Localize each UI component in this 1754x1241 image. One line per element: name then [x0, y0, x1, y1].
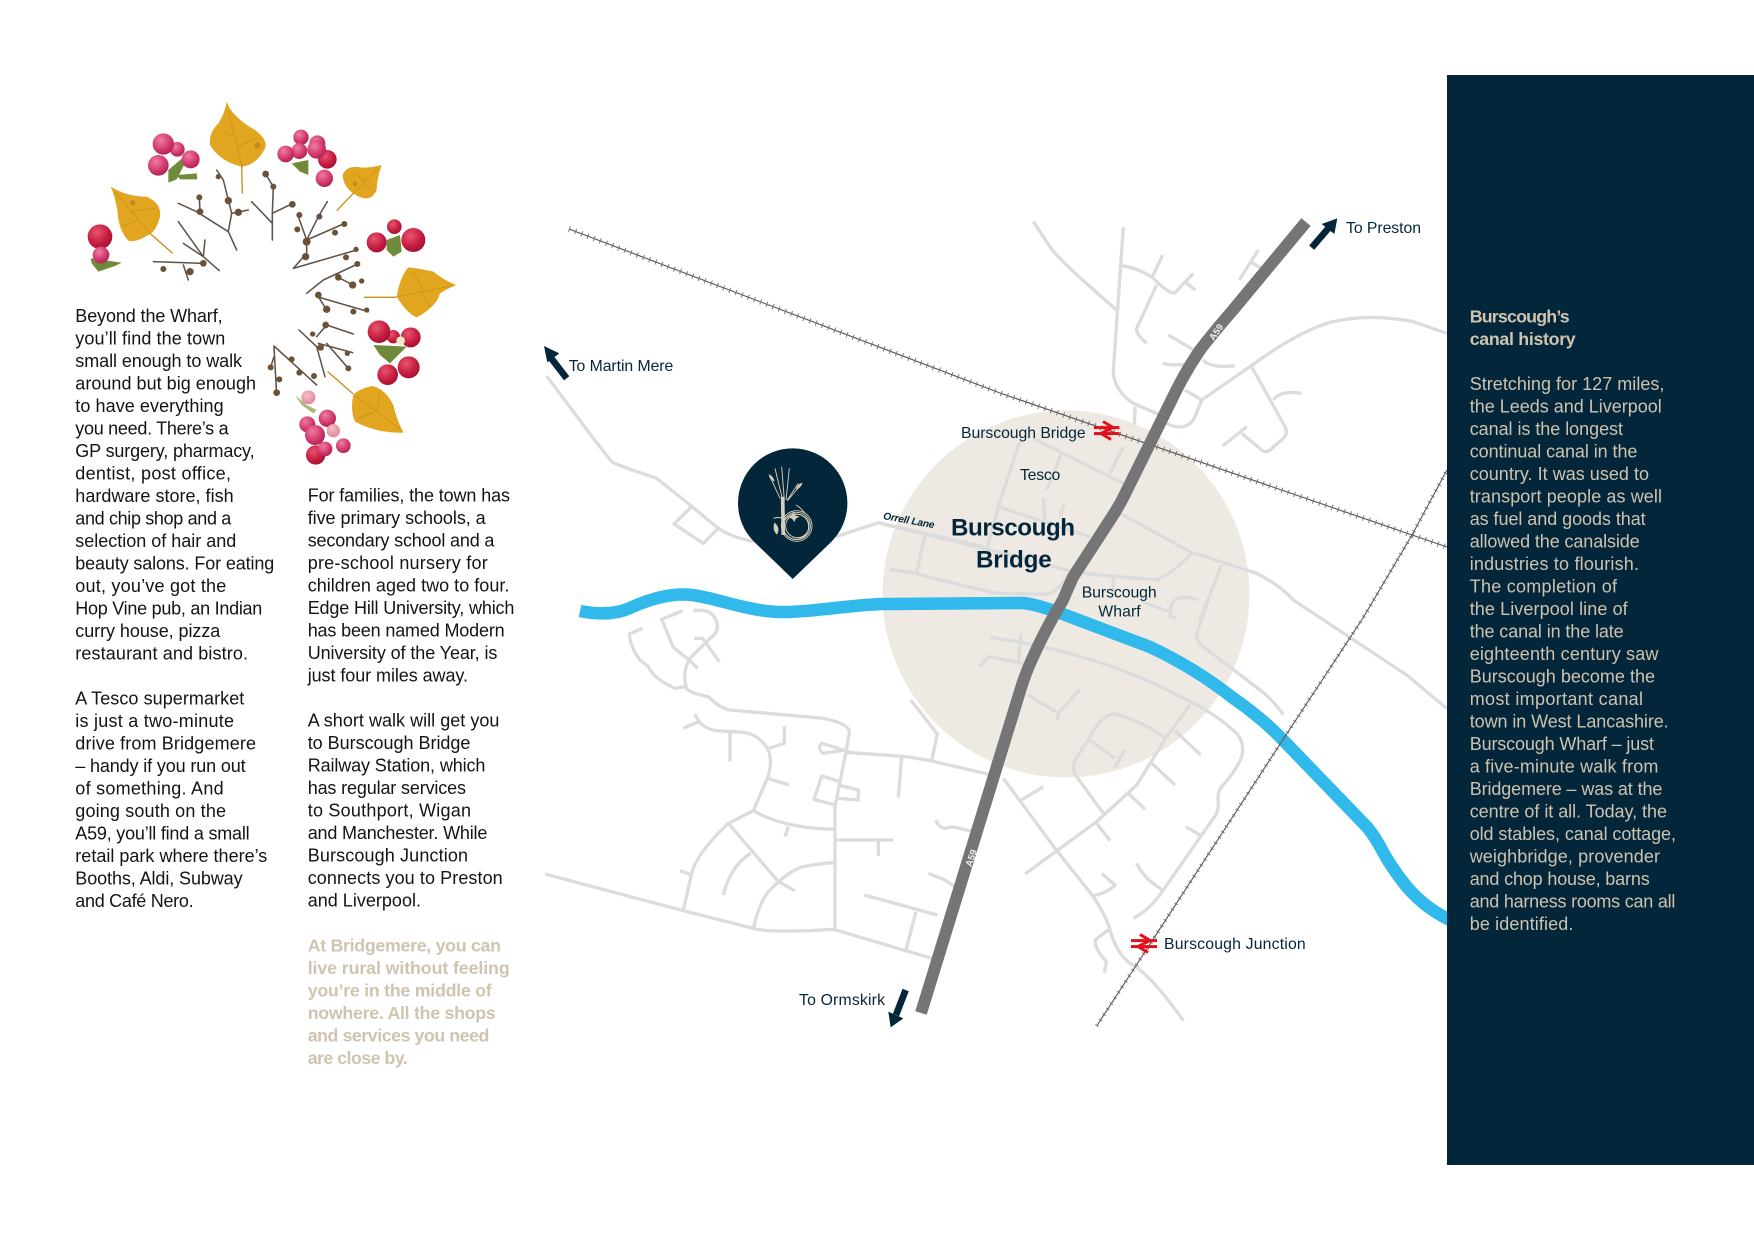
text column 2 [307, 486, 514, 911]
text column 2: pre-school nursery for [308, 553, 488, 573]
text column 1: beauty salons. For eating [75, 554, 274, 574]
text column 2: five primary schools, a [308, 508, 487, 528]
panel body text: centre of it all. Today, the [1470, 801, 1667, 821]
yellow leaves [111, 102, 456, 433]
text column 2: secondary school and a [308, 531, 495, 551]
direction arrow: To Preston [1312, 218, 1337, 248]
panel body text: canal is the longest [1470, 419, 1623, 439]
text column 1: of something. And [75, 779, 224, 799]
map labels: To Martin Mere [569, 358, 674, 375]
text column 2: to Burscough Bridge [308, 733, 470, 753]
panel body text: most important canal [1470, 689, 1643, 709]
text column 2: has been named Modern [308, 621, 505, 641]
text column 1: retail park where there’s [75, 846, 267, 866]
text column 1: around but big enough [75, 374, 256, 394]
map labels: Burscough [951, 514, 1075, 542]
text column 2: A short walk will get you [308, 711, 499, 731]
panel body text: Burscough Wharf – just [1470, 734, 1654, 754]
panel body text: as fuel and goods that [1470, 509, 1646, 529]
panel body text: country. It was used to [1470, 464, 1649, 484]
map labels: Burscough Bridge [961, 425, 1086, 442]
text column 1: you need. There’s a [75, 419, 230, 439]
direction arrow: To Ormskirk [888, 990, 906, 1027]
text column 2: connects you to Preston [308, 868, 503, 888]
map labels: Tesco [1020, 467, 1061, 484]
railway lines [569, 229, 1447, 1026]
panel body text: eighteenth century saw [1470, 644, 1659, 664]
panel heading: Burscough’s [1470, 306, 1570, 326]
map labels: Orrell Lane [882, 511, 936, 531]
text column 1: curry house, pizza [75, 621, 221, 641]
text column 1: Booths, Aldi, Subway [75, 869, 243, 889]
panel heading: canal history [1470, 329, 1576, 349]
panel body text: the Leeds and Liverpool [1470, 396, 1662, 416]
text column 1: dentist, post office, [75, 464, 231, 484]
panel body text: Burscough become the [1470, 666, 1655, 686]
text column 2: For families, the town has [308, 486, 510, 506]
text column 1: going south on the [75, 801, 226, 821]
text column 1: A Tesco supermarket [75, 689, 244, 709]
station icon: Burscough Bridge [1094, 422, 1120, 440]
A59 road labels: A59 [964, 848, 980, 868]
panel body text: allowed the canalside [1470, 531, 1640, 551]
panel body text: weighbridge, provender [1469, 846, 1660, 866]
map labels: Burscough [1082, 584, 1157, 602]
highlighted closing statement: and services you need [308, 1026, 489, 1046]
text column 2: and Manchester. While [308, 823, 487, 843]
text column 1 [75, 306, 274, 911]
panel body text: Stretching for 127 miles, [1470, 374, 1664, 394]
highlighted closing statement: nowhere. All the shops [308, 1003, 496, 1023]
map labels: Wharf [1098, 604, 1141, 620]
panel body text: industries to flourish. [1470, 554, 1639, 574]
highlighted closing statement: you’re in the middle of [308, 981, 492, 1001]
text column 1: GP surgery, pharmacy, [75, 441, 255, 461]
text column 1: A59, you’ll find a small [75, 824, 250, 844]
highlighted closing statement: are close by. [308, 1048, 408, 1068]
text column 1: selection of hair and [75, 531, 236, 551]
text column 1: Beyond the Wharf, [75, 306, 223, 326]
map [544, 218, 1450, 1027]
direction arrow: To Martin Mere [544, 346, 567, 378]
panel body text [1469, 374, 1676, 934]
panel body text: town in West Lancashire. [1470, 711, 1669, 731]
Burscough Bridge area circle [882, 410, 1250, 778]
twigs [153, 170, 369, 396]
map labels: Bridge [976, 546, 1052, 574]
text column 2: and Liverpool. [308, 891, 421, 911]
text column 1: is just a two-minute [75, 711, 234, 731]
text column 2: University of the Year, is [308, 643, 497, 663]
text column 2: to Southport, Wigan [308, 801, 471, 821]
emblem: reeds and coil [769, 467, 812, 541]
station icon: Burscough Junction [1131, 934, 1157, 952]
text column 1: Hop Vine pub, an Indian [75, 599, 262, 619]
text column 2: children aged two to four. [308, 576, 509, 596]
text column 1: out, you’ve got the [75, 576, 226, 596]
panel body text: the canal in the late [1470, 621, 1624, 641]
text column 1: and chip shop and a [75, 509, 232, 529]
highlighted closing statement: live rural without feeling [308, 958, 510, 978]
panel body text: old stables, canal cottage, [1470, 824, 1676, 844]
text column 2: has regular services [308, 778, 466, 798]
panel body text: be identified. [1470, 914, 1573, 934]
text column 1: to have everything [75, 396, 224, 416]
panel body text: continual canal in the [1470, 441, 1637, 461]
minor roads [545, 222, 1447, 1021]
panel body text: and harness rooms can all [1470, 891, 1675, 911]
text column 1: drive from Bridgemere [75, 734, 256, 754]
panel body text: The completion of [1470, 576, 1618, 596]
text column 2: Edge Hill University, which [308, 598, 514, 618]
map labels: Burscough Junction [1164, 936, 1306, 953]
panel body text: Bridgemere – was at the [1470, 779, 1662, 799]
panel heading [1470, 306, 1576, 349]
location pin with emblem [738, 448, 847, 579]
map labels: To Ormskirk [799, 992, 885, 1009]
panel body text: the Liverpool line of [1470, 599, 1629, 619]
map labels [569, 220, 1421, 1009]
panel body text: transport people as well [1470, 486, 1662, 506]
text column 2: Burscough Junction [308, 846, 468, 866]
map labels: To Preston [1346, 220, 1421, 237]
text column 1: small enough to walk [75, 351, 243, 371]
text column 1: you’ll find the town [75, 329, 225, 349]
text column 1: restaurant and bistro. [75, 644, 248, 664]
wreath of autumn leaves, berries and twigs [88, 102, 456, 465]
A59 road labels: A59 [1207, 322, 1226, 343]
A59 main road [921, 222, 1306, 1013]
panel body text: and chop house, barns [1470, 869, 1650, 889]
highlighted closing statement [308, 936, 510, 1068]
text column 1: and Café Nero. [75, 891, 194, 911]
text column 1: hardware store, fish [75, 486, 234, 506]
text column 1: – handy if you run out [75, 756, 246, 776]
panel body text: a five-minute walk from [1470, 756, 1658, 776]
berry clusters [91, 157, 407, 413]
highlighted closing statement: At Bridgemere, you can [308, 936, 501, 956]
canal [580, 595, 1450, 920]
A59 road labels [964, 322, 1226, 868]
text column 2: just four miles away. [307, 666, 468, 686]
panel: canal history [1447, 75, 1754, 1165]
text column 2: Railway Station, which [308, 756, 485, 776]
